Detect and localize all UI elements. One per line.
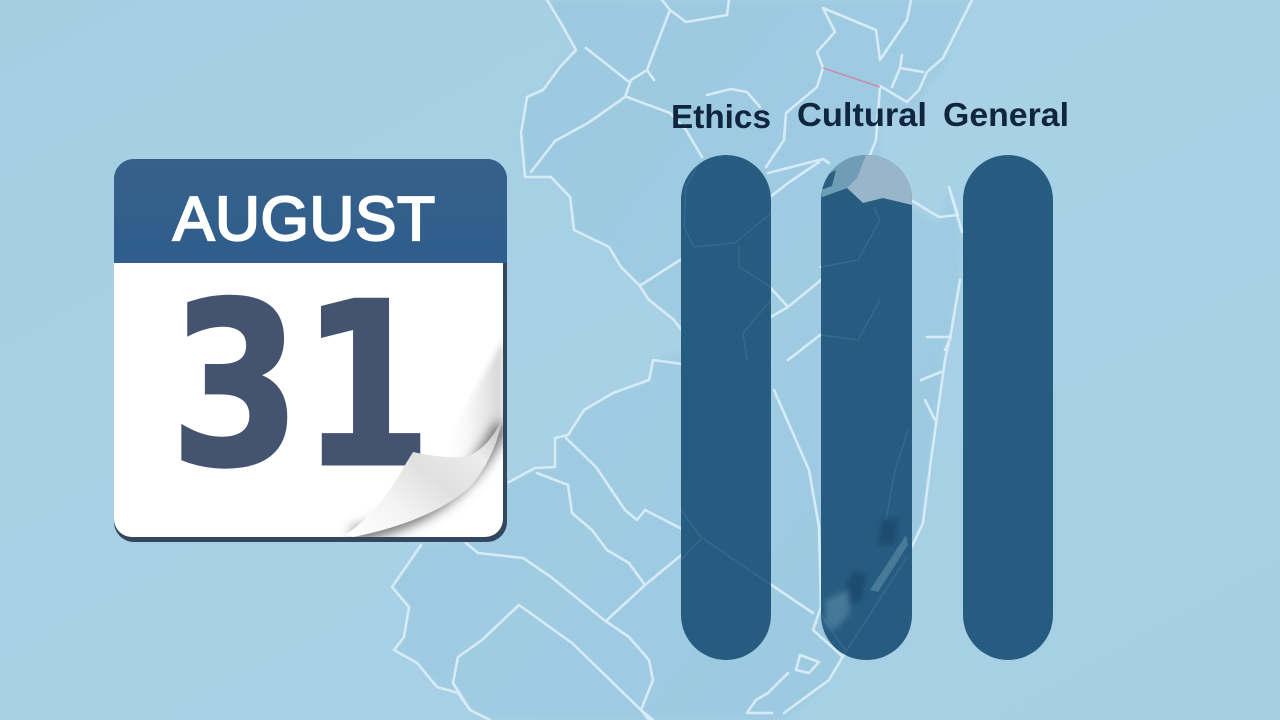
- bar: Ethics: [681, 155, 771, 660]
- calendar icon: August 31: [114, 159, 507, 542]
- bar: Cultural: [820, 155, 912, 660]
- label: Cultural: Cultural: [797, 96, 927, 133]
- calendar shadow edge: [114, 159, 507, 542]
- page curl: [345, 340, 503, 537]
- bar: General: [963, 155, 1053, 660]
- label: Ethics: Ethics: [671, 98, 771, 135]
- calendar header: [114, 159, 507, 263]
- calendar page: [114, 200, 503, 537]
- pink road line: [823, 68, 880, 87]
- label: General: General: [943, 96, 1069, 133]
- day: 31: 31: [170, 255, 432, 518]
- map of coastal region: [392, 0, 972, 720]
- month: AUGUST: AUGUST: [173, 185, 435, 254]
